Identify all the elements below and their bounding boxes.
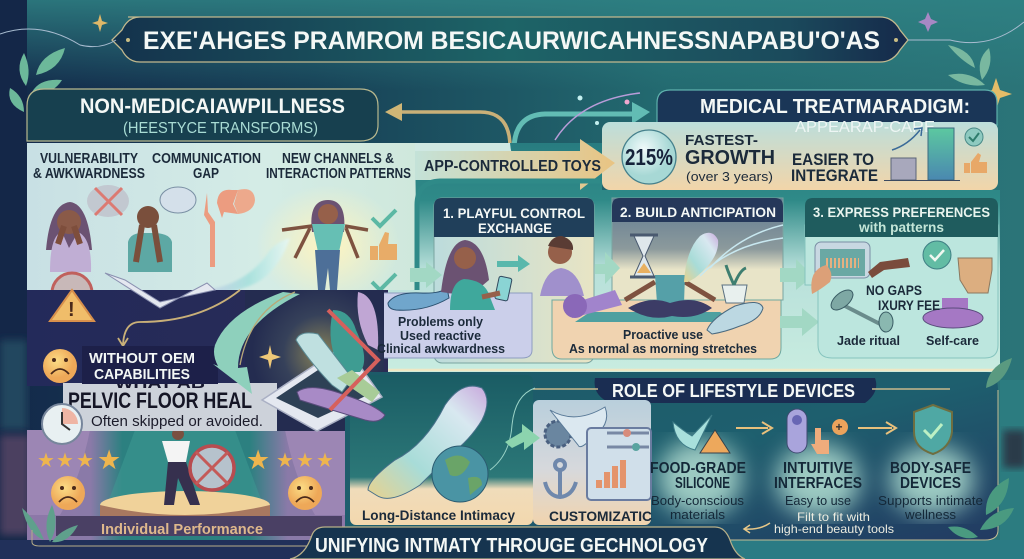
caption: card 1 text xyxy=(377,314,505,356)
note: high-end beauty tools: high-end beauty tools xyxy=(774,522,894,536)
sparkle xyxy=(259,345,281,369)
text: fastest growth: (over 3 years) xyxy=(686,169,773,184)
caption: card 1 text: Used reactive xyxy=(400,328,481,343)
header: EXCHANGE xyxy=(478,220,552,236)
text block: pelvic floor xyxy=(42,375,277,444)
caption panel xyxy=(383,293,532,358)
panel: non-medical wellness xyxy=(27,89,417,305)
icon: check xyxy=(965,128,983,146)
stage xyxy=(100,491,270,519)
panel: long-distance intimacy: Long-Distance Intimacy xyxy=(362,507,515,523)
icon: stars right xyxy=(246,445,334,475)
icon: leaves top left xyxy=(9,14,108,112)
arrows between cards xyxy=(410,252,819,336)
icon: stars left xyxy=(37,445,121,475)
column: communication gap: COMMUNICATION xyxy=(152,151,261,167)
panel header xyxy=(27,89,378,141)
icon: check bubble xyxy=(923,241,951,269)
header xyxy=(805,198,998,237)
item: food-grade silicone: materials xyxy=(670,507,726,522)
panel: medical treatment paradigm xyxy=(602,90,998,190)
caption band xyxy=(56,516,342,538)
soft lit backdrop xyxy=(658,440,974,516)
icon: globe xyxy=(432,446,488,502)
panel: app toys to avoid xyxy=(213,290,385,431)
icon: warning xyxy=(50,290,94,321)
icon: plant pot xyxy=(722,265,747,303)
woman with phone xyxy=(441,240,512,310)
wave flow xyxy=(187,238,290,294)
column: vulnerability xyxy=(33,151,145,293)
leaves bottom right xyxy=(948,478,1014,538)
icon: check and warning xyxy=(673,415,730,453)
title text: EXE'AHGES PRAMROM BESICAURWICAHNESSNAPABU'O'AS xyxy=(143,27,880,55)
yoga person xyxy=(575,275,735,322)
card frame teal xyxy=(417,181,600,290)
icon: purple mat roll xyxy=(563,290,622,318)
text: no gaps: IXURY FEE xyxy=(878,297,940,313)
header: with patterns xyxy=(858,219,944,235)
arrow: teal forward xyxy=(514,93,650,150)
panel: without OEM capabilities xyxy=(27,273,422,386)
text block: pelvic floor: Often skipped or avoided. xyxy=(91,413,263,430)
item: body-safe devices xyxy=(878,405,983,522)
note: high-end beauty tools: Filt to fit with xyxy=(797,510,870,524)
arrow xyxy=(736,422,772,434)
item: intuitive interfaces: Easy to use xyxy=(785,493,851,508)
captions: Self-care xyxy=(926,333,979,348)
icon: phone xyxy=(262,345,382,431)
item: intuitive interfaces xyxy=(774,409,862,508)
icon: stars right: ★ xyxy=(276,450,294,472)
card 3: express preferences xyxy=(805,198,998,358)
text block: without OEM: WITHOUT OEM xyxy=(89,350,195,367)
icon: anchor xyxy=(545,460,576,497)
growth body: APPEARAP-CARE xyxy=(795,119,935,136)
growth body xyxy=(602,119,998,190)
panel: without OEM capabilities: ! xyxy=(68,299,75,321)
body peach xyxy=(552,300,781,359)
sparkle wave xyxy=(700,225,783,276)
panel: customization xyxy=(533,400,652,525)
panel header: NON-MEDICAIAWPILLNESS xyxy=(80,95,345,118)
icon: stars left: ★ xyxy=(76,450,94,472)
icon: prohibited circle xyxy=(52,273,92,293)
icon: jade roller xyxy=(828,286,893,332)
icon: hourglass xyxy=(630,235,658,277)
device xyxy=(707,302,763,334)
item: food-grade silicone: SILICONE xyxy=(675,475,730,492)
icon: stars left: ★ xyxy=(37,450,55,472)
column: communication gap xyxy=(128,151,261,272)
caption: card 1 text: Clinical awkwardness xyxy=(377,341,505,356)
panel: customization: CUSTOMIZATIC xyxy=(549,508,652,524)
panel: central backdrop xyxy=(388,143,1000,372)
panel: role of lifestyle devices xyxy=(345,358,1014,540)
text block: pelvic floor: WHAT AB xyxy=(115,375,205,392)
text: easier to integrate: EASIER TO xyxy=(792,150,874,169)
icon: toy xyxy=(388,288,449,310)
iridescent device xyxy=(684,233,718,282)
item: food-grade silicone: Body-conscious xyxy=(651,493,744,508)
curved arrow xyxy=(213,292,300,394)
caption band: Individual Performance xyxy=(101,521,263,538)
item: body-safe devices: DEVICES xyxy=(900,475,961,492)
gold arrow xyxy=(118,290,240,346)
column: new channels: NEW CHANNELS & xyxy=(282,151,394,167)
header: 2. BUILD ANTICIPATION xyxy=(620,204,776,220)
header: 1. PLAYFUL CONTROL xyxy=(443,205,585,221)
leaves panel top right xyxy=(986,358,1012,388)
card 2: build anticipation xyxy=(552,198,783,359)
text: easier to integrate: INTEGRATE xyxy=(791,166,878,185)
hand xyxy=(868,258,910,278)
icon: thumbs up xyxy=(964,153,987,173)
column: vulnerability: VULNERABILITY xyxy=(40,151,138,167)
icon: tablet xyxy=(587,428,651,500)
header xyxy=(434,198,594,237)
icon: sad face xyxy=(43,349,77,383)
icon: device top xyxy=(550,407,607,447)
header: 3. EXPRESS PREFERENCES xyxy=(813,204,990,220)
icon: shield xyxy=(914,405,952,454)
pill heading: ROLE OF LIFESTYLE DEVICES xyxy=(612,381,855,401)
small arrow xyxy=(497,255,530,272)
item: body-safe devices: Supports intimate xyxy=(878,493,983,508)
panel body xyxy=(27,143,417,293)
item: body-safe devices: BODY-SAFE xyxy=(890,460,971,477)
footer banner xyxy=(290,527,745,559)
pill heading xyxy=(520,378,950,403)
panel: long-distance intimacy xyxy=(350,375,535,525)
arrow: gold return xyxy=(385,103,510,147)
item: intuitive interfaces: INTUITIVE xyxy=(783,460,853,477)
icons: crossed toys xyxy=(296,292,385,421)
caption: As normal as morning stretches xyxy=(569,341,757,356)
text block: pelvic floor: PELVIC FLOOR HEAL xyxy=(68,388,252,413)
icon: purple bowl xyxy=(923,298,983,328)
header xyxy=(657,90,997,125)
person xyxy=(162,428,200,505)
title banner xyxy=(0,17,1024,62)
icon: remote and hand: + xyxy=(836,420,843,434)
arrow: to customization xyxy=(505,424,540,450)
text block: without OEM: CAPABILITIES xyxy=(94,366,190,383)
text: fastest growth: FASTEST- xyxy=(685,132,758,149)
footer banner: UNIFYING INTMATY THROUGE GECHNOLOGY xyxy=(315,535,709,557)
thin gold arc xyxy=(240,292,295,365)
item: intuitive interfaces: INTERFACES xyxy=(774,475,862,492)
stat: 215%: 215% xyxy=(625,144,673,170)
stat: 215% xyxy=(622,130,676,184)
caption xyxy=(569,327,757,356)
item: body-safe devices: wellness xyxy=(904,507,957,522)
icon: tablet edge xyxy=(105,273,215,308)
arrow xyxy=(858,422,896,434)
captions xyxy=(837,333,979,348)
arrow: app-controlled toys: APP-CONTROLLED TOYS xyxy=(424,158,601,175)
icon: stars left: ★ xyxy=(56,450,74,472)
icon: sad face left xyxy=(51,476,85,510)
icon: clock xyxy=(42,404,82,444)
man xyxy=(540,236,584,296)
caption: card 1 text: Problems only xyxy=(398,314,484,329)
icon: device xyxy=(368,386,487,498)
item: food-grade silicone xyxy=(650,415,746,522)
ear xyxy=(811,265,831,294)
column: communication gap: GAP xyxy=(193,166,219,182)
column: new channels xyxy=(256,151,411,305)
text: no gaps xyxy=(866,282,940,313)
icon: phone waveform xyxy=(815,242,870,278)
icon: sad face right xyxy=(288,476,322,510)
text: easier to integrate xyxy=(791,150,878,185)
note: high-end beauty tools xyxy=(744,510,894,536)
icon: leaves top right xyxy=(918,12,1012,110)
bar chart xyxy=(884,128,960,180)
column: vulnerability: & AWKWARDNESS xyxy=(33,166,145,182)
item: food-grade silicone: FOOD-GRADE xyxy=(650,460,746,477)
icon: stars left: ★ xyxy=(97,445,121,475)
icon: stars right: ★ xyxy=(246,445,270,475)
text: no gaps: NO GAPS xyxy=(866,282,922,298)
icon: gear xyxy=(545,421,571,447)
icon: stars right: ★ xyxy=(316,450,334,472)
text block: without OEM xyxy=(82,346,218,384)
caption: Proactive use xyxy=(623,327,703,342)
leaves xyxy=(22,505,78,542)
icon: peach shape xyxy=(958,258,992,293)
panel: individual performance stage xyxy=(22,428,345,546)
text: fastest growth: GROWTH xyxy=(685,147,775,169)
arrow: app-controlled toys xyxy=(415,139,615,190)
text: fastest growth xyxy=(685,132,775,184)
captions: Jade ritual xyxy=(837,333,900,348)
panel header: (HEESTYCE TRANSFORMS) xyxy=(123,120,318,137)
card 1: playful control exchange xyxy=(383,198,594,363)
icon: prohibited hourglass xyxy=(190,446,234,490)
icon: stars right: ★ xyxy=(296,450,314,472)
header: MEDICAL TREATMARADIGM: xyxy=(700,96,970,118)
column: new channels: INTERACTION PATTERNS xyxy=(266,166,411,182)
header xyxy=(612,198,783,222)
